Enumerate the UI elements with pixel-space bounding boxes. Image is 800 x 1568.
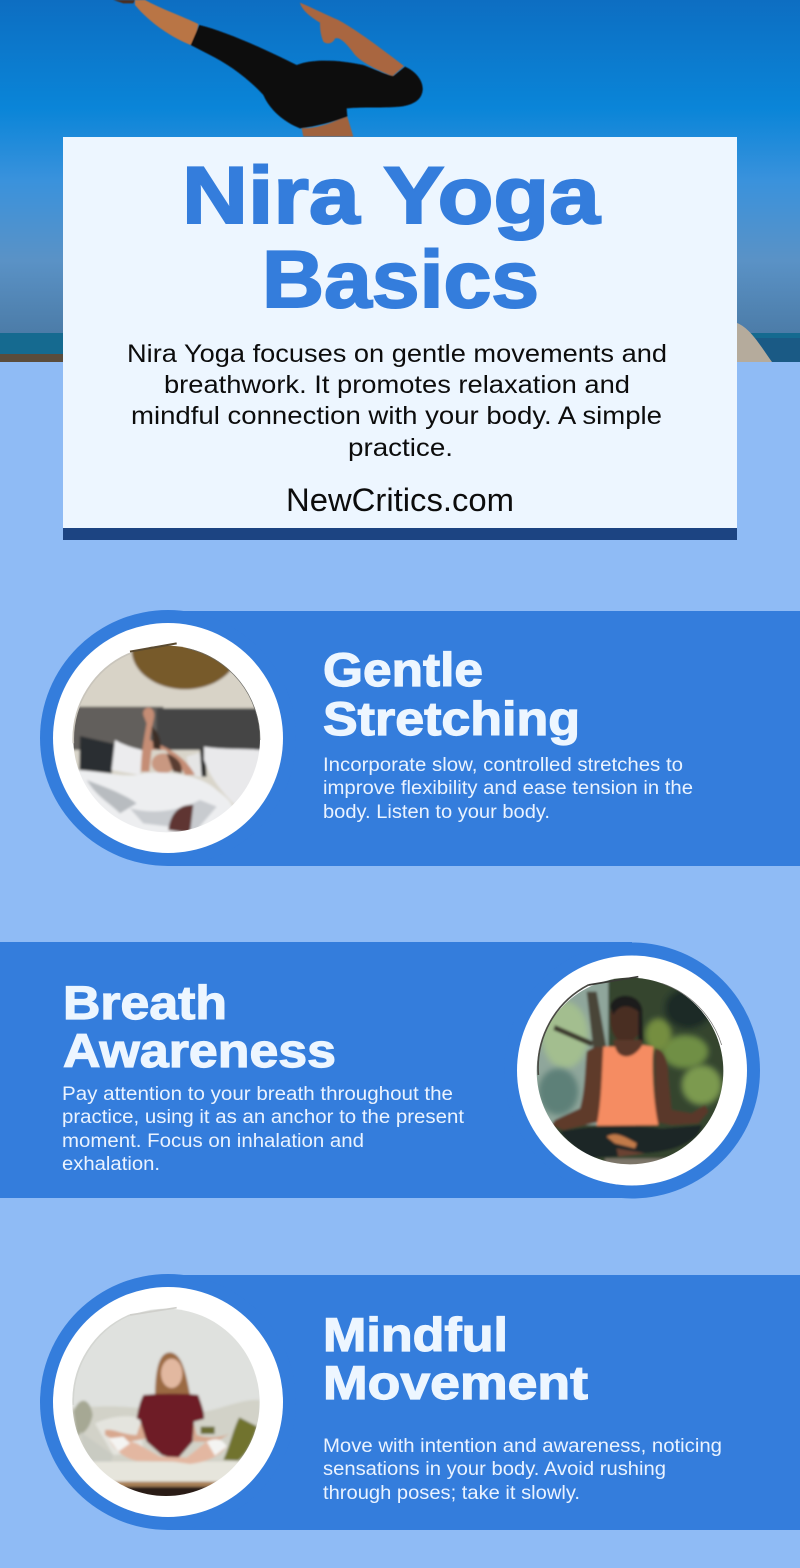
title: Basics [262, 235, 539, 325]
description [323, 1436, 722, 1504]
heading [323, 643, 580, 745]
hero photo: yoga pose against blue sky [0, 0, 800, 362]
intro text: breathwork. It promotes relaxation and [164, 371, 630, 399]
heading: Stretching [323, 692, 580, 745]
heading [63, 976, 336, 1077]
title: Nira Yoga [182, 151, 601, 241]
description: Incorporate slow, controlled stretches to [323, 755, 683, 776]
site name: NewCritics.com [286, 482, 514, 518]
panel: gentle stretching [40, 610, 800, 866]
title card [63, 137, 737, 540]
description: body. Listen to your body. [323, 802, 550, 823]
description: practice, using it as an anchor to the present [62, 1107, 465, 1128]
photo: woman meditating outdoors [535, 975, 728, 1168]
heading: Gentle [323, 643, 483, 696]
intro text: mindful connection with your body. A simple [131, 402, 662, 430]
intro text [127, 340, 667, 462]
intro text: practice. [348, 434, 453, 462]
heading: Awareness [63, 1024, 336, 1077]
description: Pay attention to your breath throughout the [62, 1084, 453, 1105]
photo: woman stretching in bed [72, 642, 260, 832]
description: Move with intention and awareness, noticing [323, 1436, 722, 1457]
description: improve flexibility and ease tension in the [323, 778, 693, 799]
title [182, 151, 601, 325]
description [323, 755, 693, 823]
description: exhalation. [62, 1154, 160, 1175]
panel: breath awareness [0, 942, 760, 1198]
description: moment. Focus on inhalation and [62, 1131, 364, 1152]
description: sensations in your body. Avoid rushing [323, 1459, 666, 1480]
intro text: Nira Yoga focuses on gentle movements and [127, 340, 667, 368]
heading: Movement [323, 1356, 588, 1409]
heading: Breath [63, 976, 227, 1029]
description [62, 1084, 465, 1175]
heading: Mindful [323, 1308, 508, 1361]
description: through poses; take it slowly. [323, 1483, 580, 1504]
panel: mindful movement [40, 1274, 800, 1530]
heading [323, 1308, 588, 1409]
photo: woman meditating on sofa [72, 1307, 260, 1496]
